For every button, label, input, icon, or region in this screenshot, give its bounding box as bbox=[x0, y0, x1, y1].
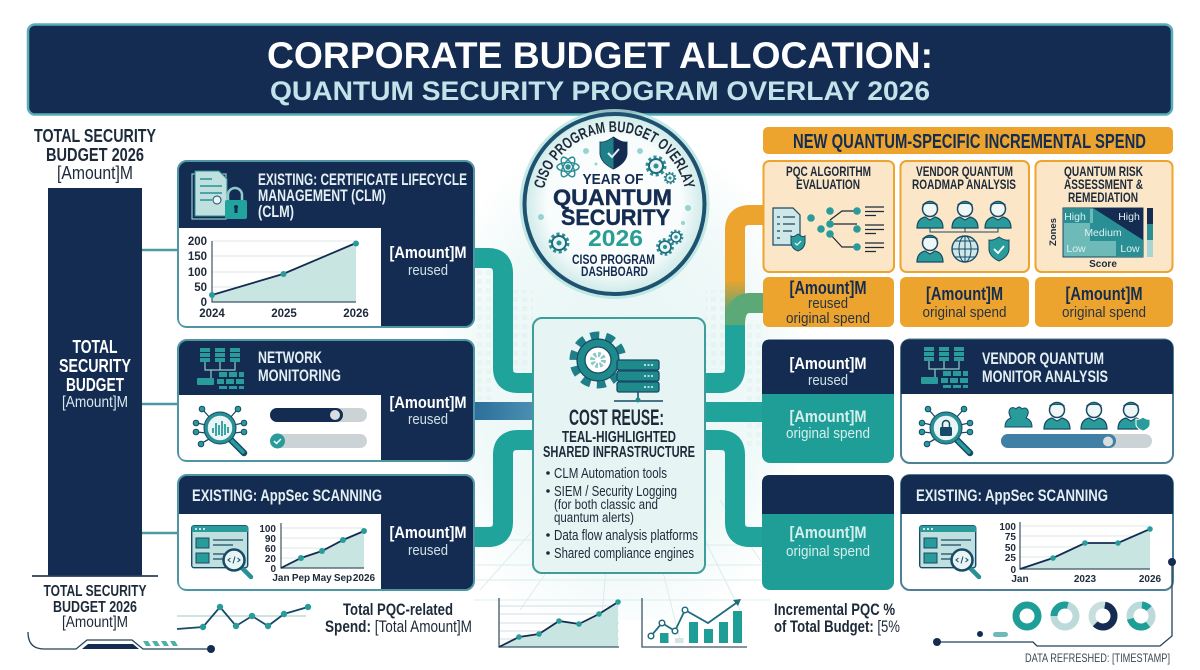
amount box: PQC reused and original: [Amount]M bbox=[790, 278, 866, 298]
bullet list: Data flow analysis platforms bbox=[554, 528, 698, 544]
medallion text: QUANTUM bbox=[553, 185, 672, 210]
left label: total security budget top bbox=[34, 126, 156, 183]
amount reused: [Amount]M bbox=[390, 243, 466, 262]
line chart: AppSec: 100 bbox=[259, 524, 276, 535]
line chart: AppSec trend: 100 bbox=[999, 522, 1016, 533]
card title bbox=[982, 349, 1108, 386]
column baseline and bottom label: BUDGET 2026 bbox=[53, 599, 137, 616]
budget column bar: BUDGET bbox=[66, 375, 124, 395]
progress bar bbox=[1001, 434, 1152, 448]
bullet list: CLM Automation tools bbox=[554, 466, 667, 482]
panel: existing AppSec scanning left bbox=[178, 475, 474, 590]
card title: MONITOR ANALYSIS bbox=[982, 367, 1108, 386]
line chart: CLM: 0 bbox=[201, 297, 207, 309]
medallion text: SECURITY bbox=[561, 205, 670, 230]
line chart: CLM: 50 bbox=[194, 282, 207, 294]
donut gauges bbox=[1016, 601, 1156, 631]
panel: PQC algorithm evaluation bbox=[764, 161, 894, 272]
title line 2: QUANTUM SECURITY PROGRAM OVERLAY 2026 bbox=[270, 76, 930, 106]
sparkline bottom left bbox=[177, 604, 311, 630]
line chart: AppSec trend: 75 bbox=[1005, 532, 1016, 543]
icon: atom bbox=[557, 155, 579, 179]
budget column bar bbox=[48, 188, 142, 576]
amount reused: reused bbox=[408, 411, 448, 428]
icon: magnifier with signal bars bbox=[193, 406, 247, 453]
amount box: vendor roadmap bbox=[900, 277, 1029, 327]
card title bbox=[258, 348, 341, 385]
left label: total security budget top: BUDGET 2026 bbox=[46, 145, 144, 165]
risk matrix heatmap: High bbox=[1118, 211, 1140, 223]
total PQC spend callout: Total PQC-related bbox=[343, 600, 453, 619]
amount reused bbox=[390, 523, 466, 559]
line chart: AppSec: Sep bbox=[334, 573, 352, 584]
budget column bar: [Amount]M bbox=[62, 394, 128, 411]
card title: EXISTING: AppSec SCANNING bbox=[916, 486, 1108, 505]
icon: browser scan bbox=[192, 526, 251, 577]
line chart: AppSec trend: Jan bbox=[1011, 574, 1029, 585]
column baseline and bottom label: TOTAL SECURITY bbox=[44, 583, 147, 600]
panel: cost reuse shared infrastructure bbox=[533, 318, 705, 573]
teal connector pipes bbox=[474, 215, 763, 537]
amount box: vendor roadmap: original spend bbox=[922, 304, 1006, 321]
line chart: AppSec trend: 50 bbox=[1005, 543, 1016, 554]
title line 1: CORPORATE BUDGET ALLOCATION: bbox=[267, 35, 933, 76]
amount card: reused and original spend bbox=[762, 340, 894, 463]
panel: vendor quantum roadmap analysis bbox=[900, 161, 1029, 272]
panel: quantum risk assessment and remediation: QUANTUM RISK bbox=[1064, 163, 1143, 179]
icon: network bbox=[197, 348, 244, 389]
line chart: CLM: 2024 bbox=[199, 308, 225, 320]
progress toggles bbox=[270, 408, 367, 448]
amount card: original spend lower: [Amount]M bbox=[790, 523, 866, 542]
medallion text: 2026 bbox=[588, 225, 643, 251]
total PQC spend callout bbox=[325, 600, 472, 636]
amount card: reused and original spend: [Amount]M bbox=[790, 407, 866, 426]
panel: vendor quantum monitor analysis bbox=[901, 340, 1173, 463]
line chart: AppSec: 2026 bbox=[353, 573, 376, 584]
amount card: reused and original spend: [Amount]M bbox=[790, 354, 866, 373]
line chart: AppSec: Jan bbox=[272, 573, 290, 584]
column baseline and bottom label: [Amount]M bbox=[62, 614, 128, 631]
icon: magnifier lock bbox=[919, 406, 973, 453]
amount card: original spend lower: original spend bbox=[786, 543, 870, 560]
amount box: quantum risk: original spend bbox=[1062, 304, 1146, 321]
amount reused: [Amount]M bbox=[390, 393, 466, 412]
risk matrix heatmap: Low bbox=[1120, 243, 1140, 255]
risk matrix heatmap: Score bbox=[1089, 259, 1117, 270]
decorative circuit bottom right bbox=[933, 558, 1176, 646]
panel heading: TEAL-HIGHLIGHTED bbox=[562, 429, 676, 446]
panel heading: COST REUSE: bbox=[569, 405, 664, 430]
line chart: CLM: 2025 bbox=[271, 308, 297, 320]
amount reused: reused bbox=[408, 542, 448, 559]
medallion sparkles bbox=[538, 148, 691, 225]
incremental PQC percent callout: Incremental PQC % bbox=[774, 600, 895, 619]
icon: certificate and lock bbox=[192, 171, 247, 219]
card title: NETWORK bbox=[258, 348, 323, 367]
panel: vendor quantum roadmap analysis: ROADMAP ANALYSIS bbox=[912, 176, 1016, 192]
risk matrix heatmap bbox=[1048, 208, 1153, 270]
panel: existing AppSec scanning right bbox=[901, 475, 1173, 590]
bullet list: quantum alerts) bbox=[554, 510, 634, 525]
amount box: quantum risk: [Amount]M bbox=[1066, 284, 1142, 304]
area chart bottom centre bbox=[499, 598, 621, 647]
line chart: AppSec trend: 25 bbox=[1005, 553, 1016, 564]
line chart: CLM: 150 bbox=[188, 251, 207, 263]
arc heading: CISO PROGRAM BUDGET OVERLAY bbox=[534, 121, 696, 188]
card title bbox=[258, 170, 467, 221]
line chart: AppSec trend: 2023 bbox=[1074, 574, 1097, 585]
amount reused: reused bbox=[408, 262, 448, 279]
icon: network bbox=[921, 347, 968, 388]
risk matrix heatmap: Medium bbox=[1084, 227, 1122, 239]
medallion text: CISO PROGRAM bbox=[572, 251, 655, 267]
amount box: quantum risk bbox=[1035, 277, 1173, 327]
medallion text bbox=[553, 171, 672, 279]
line chart: AppSec: Pep bbox=[292, 573, 310, 584]
amount reused bbox=[390, 243, 466, 279]
column baseline and bottom label bbox=[32, 576, 158, 631]
icon: shield bbox=[600, 137, 627, 169]
bar and trend chart bottom centre bbox=[642, 598, 747, 647]
card title: VENDOR QUANTUM bbox=[982, 349, 1104, 368]
incremental PQC percent callout: of Total Budget: [5% bbox=[774, 617, 900, 636]
amount box: PQC reused and original bbox=[763, 277, 894, 327]
amount box: PQC reused and original: reused bbox=[808, 295, 848, 312]
panel heading: SHARED INFRASTRUCTURE bbox=[543, 444, 695, 461]
bullet list bbox=[546, 466, 698, 562]
left label: total security budget top: TOTAL SECURITY bbox=[34, 126, 156, 146]
panel: PQC algorithm evaluation: PQC ALGORITHM bbox=[786, 163, 871, 179]
line chart: AppSec: 90 bbox=[265, 534, 276, 545]
card title: MONITORING bbox=[258, 366, 341, 385]
budget column bar: SECURITY bbox=[59, 356, 131, 376]
panel: existing certificate lifecycle management bbox=[178, 161, 474, 327]
card title: MANAGEMENT (CLM) bbox=[258, 186, 386, 205]
bullet list: Shared compliance engines bbox=[554, 546, 694, 562]
panel: PQC algorithm evaluation: EVALUATION bbox=[796, 176, 860, 192]
panel: network monitoring bbox=[178, 340, 474, 461]
line chart: AppSec trend: 0 bbox=[1010, 565, 1016, 576]
line chart: CLM: 2026 bbox=[343, 308, 369, 320]
icon: browser scan bbox=[920, 526, 979, 577]
amount card: reused and original spend: original spend bbox=[786, 425, 870, 442]
background glow and grid pattern bbox=[440, 150, 800, 640]
line chart: AppSec bbox=[259, 523, 376, 584]
line chart: AppSec trend: 2026 bbox=[1139, 574, 1162, 585]
risk matrix heatmap: Zones bbox=[1048, 218, 1059, 246]
incremental PQC percent callout bbox=[774, 600, 900, 636]
panel heading bbox=[543, 405, 695, 461]
bullet list: (for both classic and bbox=[554, 497, 658, 512]
amount box: vendor roadmap: [Amount]M bbox=[926, 284, 1003, 304]
icons: people, globe, shield bbox=[917, 202, 1011, 262]
decorative circuit bottom left bbox=[28, 632, 215, 653]
icons: medallion gears bbox=[550, 157, 682, 255]
amount card: original spend lower bbox=[762, 475, 894, 590]
panel: quantum risk assessment and remediation: ASSESSMENT & bbox=[1064, 176, 1143, 192]
line chart: CLM: 100 bbox=[188, 267, 207, 279]
budget column bar: TOTAL bbox=[72, 337, 118, 357]
left label: total security budget top: [Amount]M bbox=[57, 163, 133, 183]
line chart: AppSec: 20 bbox=[265, 554, 276, 565]
medallion text: DASHBOARD bbox=[581, 263, 648, 279]
panel: quantum risk assessment and remediation bbox=[1036, 161, 1172, 272]
amount reused: [Amount]M bbox=[390, 523, 466, 542]
panel: vendor quantum roadmap analysis: VENDOR QUANTUM bbox=[916, 163, 1013, 179]
card title: EXISTING: AppSec SCANNING bbox=[192, 486, 382, 505]
bullet list: SIEM / Security Logging bbox=[554, 484, 677, 500]
total PQC spend callout: Spend: [Total Amount]M bbox=[325, 617, 472, 636]
card title: EXISTING: CERTIFICATE LIFECYCLE bbox=[258, 170, 467, 189]
line chart: CLM bbox=[188, 236, 369, 320]
amount card: reused and original spend: reused bbox=[808, 372, 848, 389]
line chart: CLM: 200 bbox=[188, 236, 207, 248]
title banner bbox=[28, 24, 1172, 114]
medallion text: YEAR OF bbox=[582, 171, 644, 188]
card title: (CLM) bbox=[258, 202, 294, 221]
line chart: AppSec: 60 bbox=[265, 544, 276, 555]
line chart: AppSec trend bbox=[999, 522, 1162, 585]
connector lines from budget column bbox=[142, 250, 179, 533]
amount box: PQC reused and original: original spend bbox=[786, 310, 870, 327]
amount reused bbox=[390, 393, 466, 428]
line chart: AppSec: May bbox=[312, 573, 332, 584]
medallion: year of quantum security bbox=[520, 109, 710, 299]
icon: gear and server bbox=[573, 335, 663, 402]
icon: checklist and node tree bbox=[773, 207, 884, 252]
icons: people row bbox=[1005, 402, 1150, 431]
risk matrix heatmap: High bbox=[1064, 211, 1086, 223]
risk matrix heatmap: Low bbox=[1066, 243, 1086, 255]
line chart: AppSec: 0 bbox=[270, 564, 276, 575]
panel: quantum risk assessment and remediation: REMEDIATION bbox=[1068, 189, 1138, 205]
